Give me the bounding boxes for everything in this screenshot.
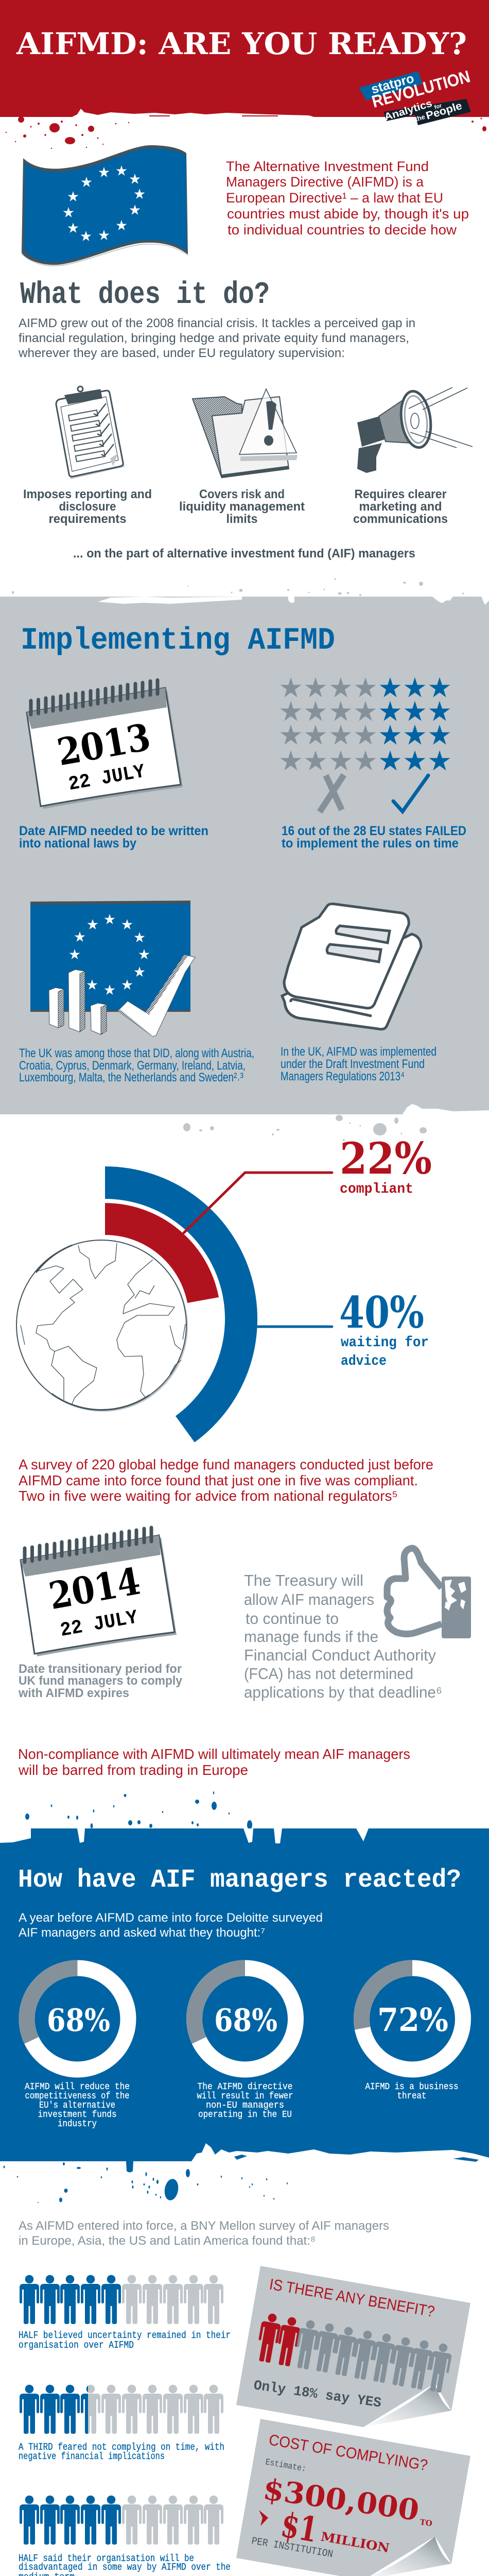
text: date AIFMD needed: Date AIFMD needed to be written (19, 824, 208, 838)
text: on the part of AIF managers: ... on the part of alternative investment fund (AIF) managers (73, 547, 415, 561)
text block: Treasury: manage funds if the (244, 1628, 378, 1646)
text: Deloitte survey intro (19, 1911, 323, 1940)
caption: half uncertain (19, 2330, 231, 2351)
stat: 40% waiting for advice (339, 1287, 429, 1369)
text: UK among those that did: The UK was among those that DID, along with Austria, (19, 1046, 254, 1060)
caption: fewer non-EU managers: non-EU managers (206, 2100, 284, 2111)
caption: marketing and communications: Requires clearer (354, 487, 447, 501)
caption: competitiveness: competitiveness of the (25, 2091, 130, 2102)
text block: what it does (18, 316, 415, 360)
caption: reporting and disclosure: requirements (48, 512, 127, 526)
text: transitional period: with AIFMD expires (18, 1686, 129, 1700)
caption: a third (19, 2442, 224, 2462)
text: UK implementation: In the UK, AIFMD was implemented (281, 1045, 436, 1059)
logo: StatPro Revolution: Analytics (383, 98, 433, 123)
stat: 40% waiting for advice: 40% (339, 1287, 424, 1338)
note: cost of complying (236, 2419, 470, 2576)
caption: competitiveness: investment funds (38, 2110, 116, 2120)
text: transitional period: Date transitionary period for (19, 1662, 182, 1676)
icon: clipboard (56, 386, 125, 479)
chart: people row half uncertain (20, 2275, 223, 2324)
caption: fewer non-EU managers: operating in the EU (198, 2110, 292, 2120)
caption: fewer non-EU managers: The AIFMD directive (198, 2082, 292, 2092)
text block: what it does: AIFMD grew out of the 2008 financial crisis. It tackles a perceived gap in (19, 316, 415, 330)
icon: calendar 2013: 22 JULY (67, 760, 147, 796)
caption: competitiveness (25, 2082, 130, 2129)
caption: half disadvantaged: HALF said their organisation will be (19, 2553, 194, 2564)
text: UK implementation: under the Draft Investment Fund (281, 1057, 425, 1071)
caption: reporting and disclosure: Imposes reporting and (23, 487, 152, 501)
caption: fewer non-EU managers (197, 2082, 293, 2120)
text block: survey of 220 managers: AIFMD came into force found that just one in five was compliant. (19, 1472, 418, 1488)
text block: Treasury: applications by that deadline⁶ (244, 1683, 442, 1701)
heading: How have AIF managers reacted?: How have AIF managers reacted? (18, 1866, 461, 1895)
icon: EU flag (22, 145, 188, 266)
text block: non-compliance: will be barred from trading in Europe (18, 1762, 248, 1778)
heading: Implementing AIFMD: Implementing AIFMD (21, 623, 335, 658)
text: BNY Mellon survey intro: As AIFMD entered into force, a BNY Mellon survey of AIF managers (19, 2219, 389, 2233)
globe (16, 1240, 188, 1412)
text: UK among those that did: Croatia, Cyprus, Denmark, Germany, Ireland, Latvia, (19, 1059, 246, 1073)
text: Deloitte survey intro: A year before AIFMD came into force Deloitte surveyed (19, 1911, 323, 1925)
note: cost of complying: $300,000 (261, 2472, 421, 2528)
paint splatter: red (6, 116, 486, 149)
caption: half uncertain: organisation over AIFMD (19, 2340, 134, 2351)
chart: donut 68% competitiveness (27, 1968, 128, 2070)
text block: Treasury (244, 1571, 442, 1701)
panel: header band (0, 0, 489, 125)
text block: Treasury: (FCA) has not determined (244, 1665, 413, 1683)
caption: risk and liquidity: Covers risk and (199, 487, 285, 501)
caption: business threat: AIFMD is a business (365, 2082, 458, 2092)
text: Deloitte survey intro: AIF managers and asked what they thought:⁷ (19, 1926, 265, 1940)
caption: reporting and disclosure: disclosure (59, 500, 116, 514)
logo: StatPro Revolution: People (425, 100, 463, 122)
icon: tick (393, 775, 428, 811)
text: UK among those that did: Luxembourg, Malta, the Netherlands and Sweden²˒³ (19, 1071, 243, 1084)
icon: calendar 2014 (21, 1528, 177, 1656)
text block: Treasury: The Treasury will (244, 1571, 363, 1589)
chart arc: 22% compliant (105, 1203, 219, 1303)
note: cost of complying: $1 (278, 2504, 321, 2550)
caption: risk and liquidity: liquidity management (179, 500, 305, 514)
caption: marketing and communications: communications (353, 512, 448, 526)
chart: people row half disadvantaged (20, 2496, 223, 2545)
logo: StatPro Revolution (359, 66, 472, 125)
caption: risk and liquidity (179, 487, 305, 526)
note: cost of complying: MILLION (320, 2529, 391, 2555)
text block: Treasury: to continue to (246, 1609, 339, 1628)
logo: StatPro Revolution: for (433, 103, 443, 111)
text: transitional period (18, 1662, 183, 1700)
chart: donut 68% fewer managers: 68% (214, 2003, 277, 2039)
caption: marketing and communications: marketing and (359, 500, 442, 514)
caption: a third: negative financial implications (19, 2451, 165, 2462)
paint splatter: grey (183, 1115, 427, 1141)
text block: survey of 220 managers: Two in five were waiting for advice from national regulators⁵ (19, 1488, 398, 1504)
caption: competitiveness: EU's alternative (39, 2100, 115, 2111)
chart: survey radial (16, 1133, 432, 1443)
logo: StatPro Revolution: statpro (370, 71, 416, 97)
caption: reporting and disclosure (23, 487, 152, 526)
text: UK among those that did (19, 1046, 254, 1084)
note: is there any benefit: IS THERE ANY BENEFIT? (268, 2276, 436, 2320)
text block: what it does: financial regulation, bringing hedge and private equity fund managers, (19, 331, 409, 345)
caption: half disadvantaged (19, 2553, 231, 2576)
icon: megaphone (357, 387, 473, 473)
text block: survey of 220 managers: A survey of 220 global hedge fund managers conducted just before (19, 1456, 433, 1472)
caption: a third: A THIRD feared not complying on time, with (19, 2442, 224, 2453)
icon: thumbs up (387, 1548, 471, 1638)
icon: calendar 2013 (27, 680, 183, 809)
logo: StatPro Revolution: REVOLUTION (370, 66, 472, 111)
panel: implementing AIFMD (0, 578, 489, 1114)
icon: calendar 2014: 22 JULY (59, 1606, 139, 1642)
note: is there any benefit (236, 2266, 470, 2427)
text: transitional period: UK fund managers to comply (19, 1674, 183, 1688)
text block: Treasury: Financial Conduct Authority (244, 1646, 436, 1664)
title: AIFMD: ARE YOU READY? (16, 26, 467, 61)
caption: competitiveness: AIFMD will reduce the (25, 2082, 130, 2092)
text: BNY Mellon survey intro: in Europe, Asia, the US and Latin America found that:⁸ (19, 2234, 316, 2248)
logo: StatPro Revolution: the (414, 113, 426, 123)
text block: intro: countries must abide by, though it's up (227, 206, 469, 222)
chart arc: 40% waiting (105, 1166, 257, 1443)
text: 16 out of 28 states failed: 16 out of the 28 EU states FAILED (282, 824, 466, 838)
text block: intro: to individual countries to decide how (228, 222, 457, 238)
note: cost of complying: TO (419, 2517, 433, 2528)
stat: 22% compliant: 22% (340, 1133, 432, 1184)
heading: What does it do?: What does it do? (20, 278, 270, 313)
caption: half disadvantaged: disadvantaged in some way by AIFMD over the (19, 2562, 231, 2573)
text: 16 out of 28 states failed: to implement the rules on time (282, 836, 459, 851)
icon: calendar 2013: 2013 (54, 715, 154, 774)
text: UK implementation (281, 1045, 436, 1083)
caption: business threat: threat (397, 2091, 426, 2102)
leader line: 22% (184, 1173, 332, 1233)
caption: fewer non-EU managers: will result in fewer (197, 2091, 293, 2102)
text block: survey of 220 managers (19, 1456, 433, 1504)
stat: 22% compliant: compliant (340, 1181, 413, 1197)
icon: rule book (282, 904, 421, 1029)
text block: intro: Managers Directive (AIFMD) is a (226, 174, 424, 190)
stat: 40% waiting for advice: waiting for (341, 1335, 429, 1351)
chart: donut 68% fewer managers (195, 1968, 295, 2070)
leader line: 40% (258, 1325, 332, 1328)
panel: how have AIF managers reacted (0, 1791, 489, 2162)
icon: cross (320, 775, 344, 812)
stat: 40% waiting for advice: advice (341, 1353, 387, 1369)
caption: competitiveness: industry (58, 2119, 97, 2129)
caption: marketing and communications (353, 487, 448, 526)
icon: EU flag with bars and tick (30, 901, 195, 1037)
note: cost of complying: Estimate: (265, 2458, 307, 2475)
caption: business threat (365, 2082, 458, 2102)
text block: non-compliance: Non-compliance with AIFMD will ultimately mean AIF managers (18, 1746, 410, 1762)
text block: non-compliance (18, 1746, 410, 1778)
text block: intro (226, 159, 469, 238)
text: 16 out of 28 states failed (282, 824, 466, 851)
note: is there any benefit: Only 18% say YES (253, 2378, 382, 2412)
text block: Treasury: allow AIF managers (244, 1590, 374, 1608)
chart: donut 68% competitiveness: 68% (47, 2003, 110, 2039)
chart: EU states star grid (281, 677, 450, 770)
text block: intro: The Alternative Investment Fund (226, 159, 429, 174)
text: date AIFMD needed: into national laws by (19, 836, 136, 851)
icon: calendar 2014: 2014 (46, 1559, 144, 1618)
caption: risk and liquidity: limits (226, 512, 257, 526)
text block: what it does: wherever they are based, under EU regulatory supervision: (18, 346, 345, 360)
text block: intro: European Directive¹ – a law that EU (226, 190, 443, 206)
chart: donut 72% business threat (361, 1968, 463, 2070)
caption: half uncertain: HALF believed uncertainty remained in their (19, 2330, 231, 2341)
text: BNY Mellon survey intro (19, 2219, 389, 2248)
note: cost of complying: PER INSTITUTION (251, 2535, 334, 2561)
chart: donut 72% business threat: 72% (377, 2001, 448, 2039)
text: date AIFMD needed (19, 824, 208, 851)
text: UK implementation: Managers Regulations 2013⁴ (281, 1070, 405, 1083)
note: cost of complying: COST OF COMPLYING? (268, 2431, 429, 2474)
icon: folder and warning triangle (193, 389, 298, 478)
paint splatter: blue (4, 2161, 288, 2203)
chart: people row a third (20, 2385, 223, 2434)
